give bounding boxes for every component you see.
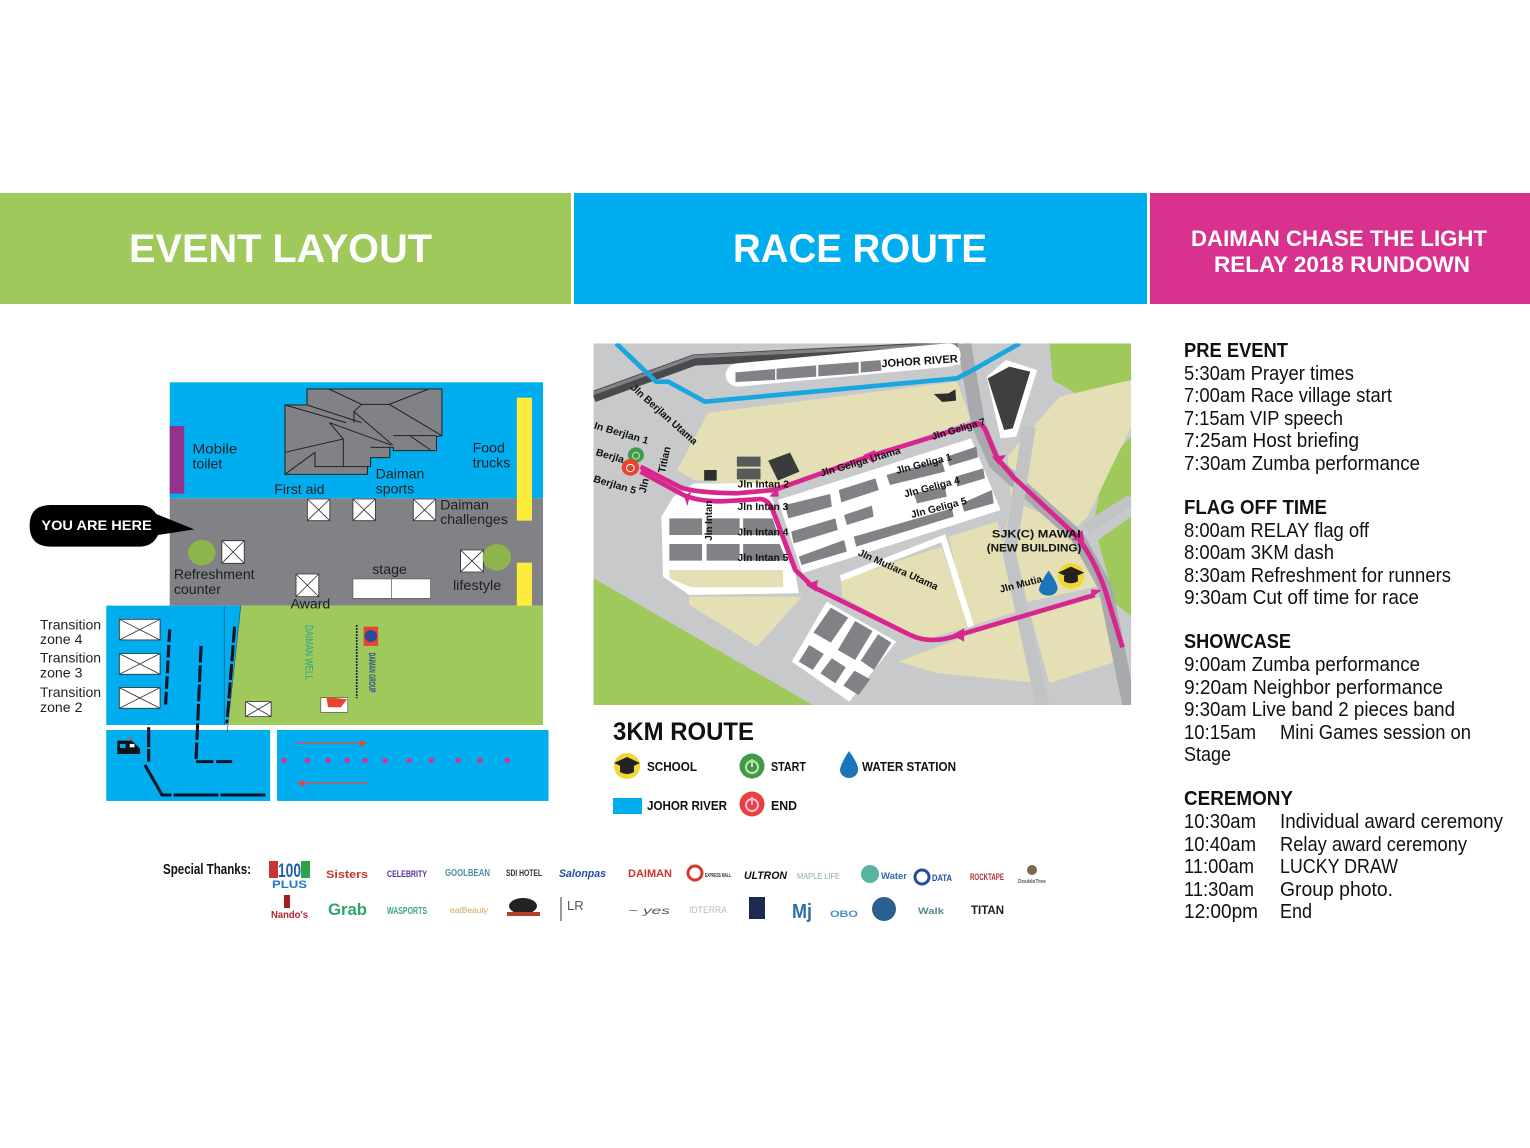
legend school	[614, 753, 697, 779]
section: flag off time: 8:30am Refreshment for runners	[1184, 565, 1451, 587]
section: showcase: Mini Games session on	[1280, 722, 1471, 744]
trees	[188, 540, 511, 571]
sponsor logos row 1: EXPRESS MALL	[705, 873, 731, 879]
johor river	[616, 343, 1020, 402]
sponsor logos row 1: 100	[278, 861, 301, 882]
header: event layout	[0, 193, 571, 304]
pink markers	[281, 758, 510, 763]
sponsor logos row 2	[271, 895, 1004, 923]
panel: event layout map	[30, 382, 549, 801]
layout labels: Award	[290, 596, 330, 612]
vertical road	[964, 343, 1129, 705]
legend: 3km route	[613, 718, 956, 816]
map labels: SJK(C) MAWAI	[992, 529, 1081, 541]
section: pre event: PRE EVENT	[1184, 340, 1288, 362]
legend johor river	[613, 798, 728, 814]
section: ceremony: 11:00am	[1184, 856, 1254, 878]
layout labels: Daiman	[376, 466, 424, 481]
sponsor logos row 1: DoubleTree	[1018, 879, 1046, 885]
map labels	[592, 348, 1082, 595]
green field	[227, 606, 543, 725]
lower blue road right	[277, 730, 549, 801]
you are here callout	[30, 505, 194, 547]
layout labels: Transition	[40, 684, 101, 700]
section: ceremony: 12:00pm	[1184, 901, 1258, 923]
section: showcase: SHOWCASE	[1184, 631, 1291, 653]
sponsor logos row 2: OBO	[830, 909, 858, 919]
flag booth	[321, 697, 348, 712]
sponsor logos row 1: CELEBRITY	[387, 869, 427, 879]
building roof	[285, 389, 442, 474]
sponsor logos row 1: Sisters	[326, 869, 368, 881]
sponsor logos row 2: ~ yes	[628, 906, 670, 917]
map labels: Titian	[657, 446, 674, 474]
east side road	[1094, 495, 1132, 518]
layout labels: sports	[376, 481, 414, 496]
ambulance icon	[117, 737, 140, 754]
section: flag off time: 9:30am Cut off time for race	[1184, 587, 1419, 609]
map labels: Jln	[638, 478, 652, 494]
vertical sponsor logos: DAIMAN GROUP	[367, 653, 377, 693]
header: race route	[574, 193, 1147, 304]
grey road zone	[170, 498, 543, 606]
section: ceremony: 10:30am	[1184, 811, 1256, 833]
map labels: Jln Intan	[704, 501, 715, 541]
sponsor logos row 2: eatBeauty	[450, 906, 488, 915]
sponsor logos row 2: TITAN	[971, 903, 1004, 917]
mobile toilet bar	[170, 426, 184, 494]
sponsor logos row 2: Nando's	[271, 910, 308, 921]
street blocks centre	[778, 438, 1001, 573]
section: showcase: 10:15am	[1184, 722, 1256, 744]
layout labels: trucks	[473, 455, 510, 470]
layout labels: Food	[473, 440, 505, 456]
thin divider line	[224, 606, 241, 733]
legend start	[740, 754, 806, 778]
legend title: 3KM ROUTE	[613, 718, 754, 746]
sponsors strip	[163, 861, 1046, 923]
map labels: Jln Berjlan Utama	[628, 383, 699, 448]
vertical sponsor logos: DAIMAN WELL	[302, 625, 314, 680]
map labels: Jln Geliga 1	[895, 452, 953, 477]
sponsor logos row 1: PLUS	[272, 879, 307, 891]
map labels: Jln Mutiara Utama	[856, 548, 940, 593]
legend water station: WATER STATION	[862, 759, 956, 774]
beige land	[677, 380, 1131, 683]
section: showcase	[1184, 631, 1471, 766]
layout labels: counter	[174, 581, 221, 597]
section: ceremony: 11:30am	[1184, 879, 1254, 901]
blocks south	[792, 602, 896, 702]
map labels: Jln Intan 3	[738, 502, 789, 513]
sponsor logos row 1: ULTRON	[744, 870, 788, 882]
panel: race route map	[592, 343, 1131, 705]
section: ceremony: LUCKY DRAW	[1280, 856, 1398, 878]
layout labels: lifestyle	[453, 577, 502, 593]
pink race route	[640, 423, 1122, 647]
layout labels	[40, 440, 510, 715]
red arrow left	[297, 780, 368, 787]
layout labels: zone 2	[40, 699, 83, 715]
layout labels: stage	[372, 561, 407, 577]
map labels: Berjla	[594, 448, 626, 466]
layout labels: zone 4	[40, 631, 83, 647]
layout labels: First aid	[274, 481, 325, 497]
sponsor logos row 2: Walk	[918, 906, 945, 916]
section: pre event: 5:30am Prayer times	[1184, 363, 1354, 385]
section: showcase: Stage	[1184, 744, 1231, 766]
black dashed course lines	[145, 627, 267, 795]
street blocks left	[661, 483, 799, 595]
sponsor logos row 2: Mj	[792, 901, 812, 923]
layout labels: Daiman	[440, 497, 489, 512]
sponsor logos row 1: DATA	[932, 873, 952, 883]
vertical sponsor logos	[302, 625, 378, 698]
layout labels: Refreshment	[174, 566, 255, 582]
layout labels: Mobile	[192, 441, 238, 456]
layout labels: challenges	[440, 511, 508, 527]
legend johor river: JOHOR RIVER	[647, 798, 728, 813]
legend school: SCHOOL	[647, 759, 697, 774]
map labels: Jln Geliga 5	[910, 496, 968, 521]
sponsor logos row 2: Grab	[328, 900, 367, 919]
header band	[0, 193, 1530, 304]
lower blue road left	[106, 730, 270, 801]
layout labels: zone 3	[40, 665, 83, 680]
sponsor logos row 1: DAIMAN	[628, 868, 672, 880]
route arrowheads	[684, 450, 1102, 642]
map labels: In Berjlan 1	[593, 421, 650, 447]
small dark buildings	[704, 389, 956, 481]
stage	[353, 579, 431, 598]
special thanks label: Special Thanks:	[163, 861, 251, 878]
sponsor logos row 2: IDTERRA	[689, 905, 727, 915]
rundown schedule	[1184, 340, 1503, 923]
sponsor logos row 1: Water	[881, 871, 908, 881]
section: flag off time: 8:00am RELAY flag off	[1184, 520, 1369, 542]
section: ceremony: Relay award ceremony	[1280, 834, 1467, 856]
layout labels: Transition	[40, 650, 101, 666]
section: pre event: 7:25am Host briefing	[1184, 430, 1359, 452]
section: pre event: 7:30am Zumba performance	[1184, 453, 1420, 475]
sponsor logos row 1: Salonpas	[559, 868, 606, 880]
red arrow right	[296, 740, 367, 747]
green areas	[593, 343, 1131, 705]
map labels: Jln Geliga 7	[930, 417, 987, 443]
section: flag off time: FLAG OFF TIME	[1184, 497, 1327, 519]
riverside block	[735, 355, 948, 382]
map labels: Jln Geliga Utama	[819, 446, 902, 479]
sponsor logos row 2: LR	[567, 898, 584, 913]
section: pre event: 7:00am Race village start	[1184, 385, 1392, 407]
sponsor logos row 1: MAPLE LIFE	[797, 872, 840, 881]
start and end markers	[622, 447, 644, 476]
section: ceremony: End	[1280, 901, 1312, 923]
legend water station	[840, 751, 956, 778]
layout labels: Transition	[40, 617, 101, 632]
section: flag off time: 8:00am 3KM dash	[1184, 542, 1334, 564]
map labels: (NEW BUILDING)	[987, 543, 1082, 554]
section: flag off time	[1184, 497, 1451, 609]
you are here callout: YOU ARE HERE	[41, 517, 152, 533]
map labels: Jln Intan 4	[738, 527, 789, 538]
top blue zone	[170, 382, 543, 498]
sponsor logos row 1: SDI HOTEL	[506, 868, 542, 878]
map labels: Jln Intan 5	[738, 553, 789, 564]
transition blue zone	[106, 606, 241, 725]
header: rundown	[1150, 193, 1530, 304]
section: ceremony	[1184, 788, 1503, 923]
section: ceremony: 10:40am	[1184, 834, 1256, 856]
crossed booths	[119, 499, 483, 717]
map labels: JOHOR RIVER	[881, 353, 958, 370]
school marker	[1058, 563, 1084, 589]
dark main road	[593, 344, 959, 397]
cross road	[1009, 427, 1042, 705]
section: ceremony: Individual award ceremony	[1280, 811, 1503, 833]
map labels: Jln Mutia	[999, 574, 1044, 595]
sponsor logos row 1: ROCKTAPE	[970, 872, 1004, 882]
header: rundown: DAIMAN CHASE THE LIGHT	[1191, 226, 1488, 251]
map labels: Jln Geliga 4	[903, 475, 961, 500]
section: pre event: 7:15am VIP speech	[1184, 408, 1343, 430]
section: ceremony: CEREMONY	[1184, 788, 1294, 810]
section: showcase: 9:20am Neighbor performance	[1184, 677, 1443, 699]
header: rundown: RELAY 2018 RUNDOWN	[1214, 252, 1470, 277]
riverside tower	[987, 360, 1037, 438]
map labels: Berjlan 5	[592, 474, 638, 497]
section: ceremony: Group photo.	[1280, 879, 1393, 901]
header: event layout: EVENT LAYOUT	[129, 227, 432, 271]
lifestyle bar	[517, 563, 532, 606]
map labels: Jln Intan 2	[738, 479, 789, 490]
sponsor logos row 2: WASPORTS	[387, 906, 427, 917]
sponsor logos row 1	[269, 861, 1046, 891]
white lot street	[841, 538, 971, 627]
map base	[593, 343, 1131, 705]
legend start: START	[771, 759, 806, 774]
section: showcase: 9:30am Live band 2 pieces band	[1184, 699, 1455, 721]
legend end	[740, 792, 797, 816]
food trucks bar	[517, 398, 532, 521]
legend end: END	[771, 798, 797, 813]
header: race route: RACE ROUTE	[733, 227, 987, 271]
layout labels: toilet	[192, 456, 222, 471]
sponsor logos row 1: GOOLBEAN	[445, 868, 490, 879]
water station marker	[1039, 571, 1058, 596]
section: pre event	[1184, 340, 1420, 475]
section: showcase: 9:00am Zumba performance	[1184, 654, 1420, 676]
